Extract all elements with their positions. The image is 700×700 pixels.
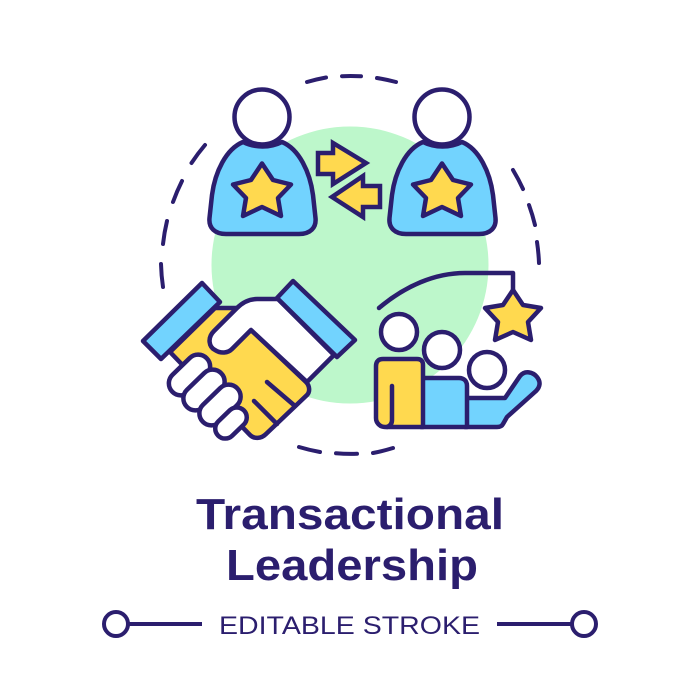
icon: handshake [143, 281, 355, 443]
left cuff [143, 283, 220, 359]
star [485, 290, 541, 340]
fingers [164, 350, 251, 443]
third person [465, 372, 540, 427]
yellow hand [170, 308, 309, 438]
finger creases [254, 382, 295, 424]
icon: right person with star [389, 90, 496, 234]
icon: team reaching for star [376, 273, 541, 427]
icon: left person with star [209, 90, 316, 234]
hanging star line [379, 273, 513, 308]
dashed ring [161, 76, 539, 454]
second person [421, 378, 467, 427]
first person [376, 359, 423, 427]
icon: exchange arrows [318, 143, 380, 217]
title: Leadership [226, 541, 478, 590]
editable stroke label [104, 612, 596, 640]
editable stroke label: EDITABLE STROKE [219, 612, 480, 640]
green background circle [212, 126, 488, 404]
right cuff [277, 281, 355, 357]
title [196, 490, 504, 590]
white hand [210, 299, 334, 382]
title: Transactional [196, 490, 504, 539]
